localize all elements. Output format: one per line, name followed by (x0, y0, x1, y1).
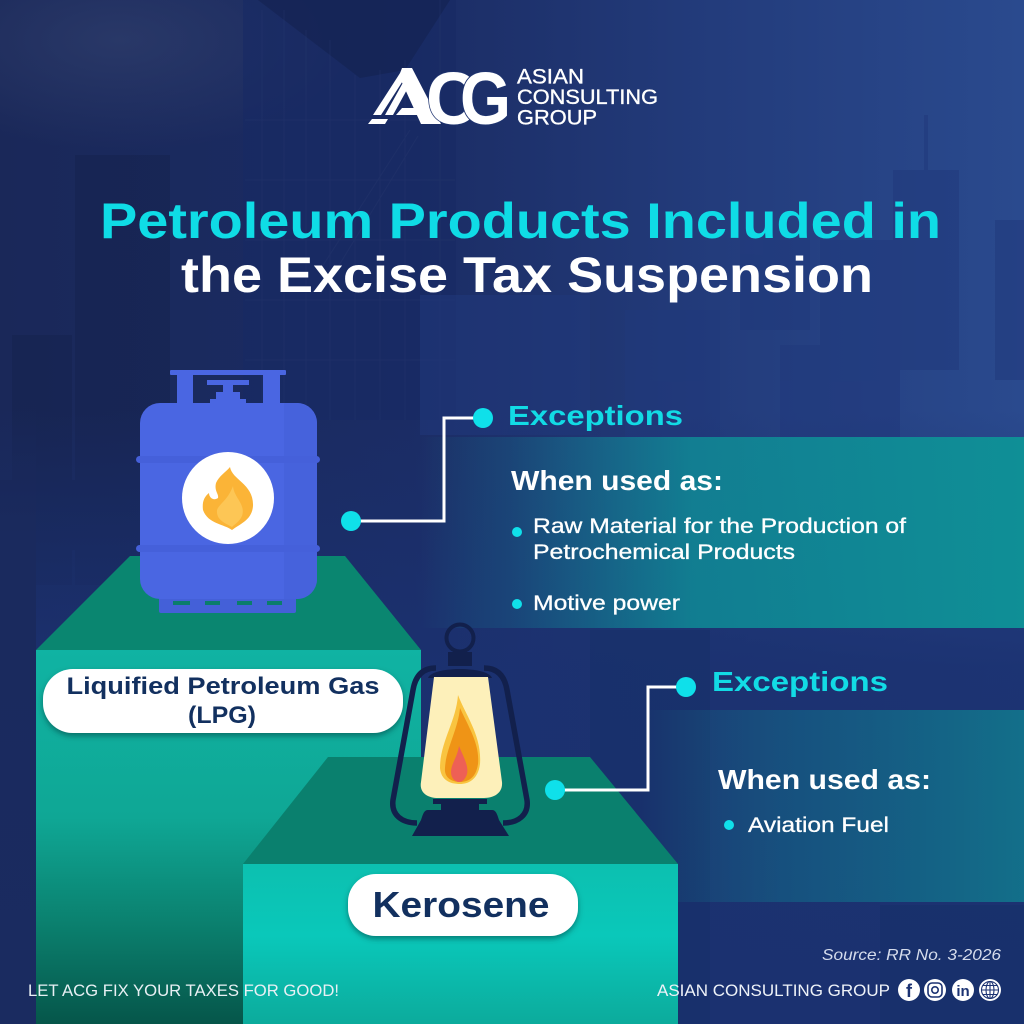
icon: linkedin: in (956, 983, 970, 1000)
logo wordmark: CONSULTING (517, 86, 658, 109)
logo: Asian Consulting Group (368, 57, 658, 140)
social icons (898, 979, 1001, 1001)
text block: LPG exceptions (508, 400, 906, 615)
text block: LPG exceptions: Motive power (533, 592, 680, 615)
title: Petroleum Products Included in (100, 193, 941, 249)
title (100, 193, 941, 303)
pedestal: LPG (36, 556, 421, 1024)
icon: LPG cylinder (136, 370, 320, 613)
label: kerosene pill (348, 874, 578, 936)
logo wordmark (517, 66, 658, 130)
panel: LPG exceptions band (420, 437, 1024, 628)
icon: facebook: f (906, 981, 913, 1001)
icon: website globe (979, 979, 1001, 1001)
footer tagline: LET ACG FIX YOUR TAXES FOR GOOD! (28, 982, 339, 1000)
logo wordmark: ASIAN (517, 66, 584, 88)
label: LPG pill: Liquified Petroleum Gas (66, 673, 380, 700)
footer brand name: ASIAN CONSULTING GROUP (657, 982, 890, 1000)
title: the Excise Tax Suspension (181, 247, 873, 303)
icon: instagram (924, 979, 946, 1001)
label: LPG pill: (LPG) (188, 702, 256, 729)
icon: kerosene lantern (393, 624, 527, 836)
logo mark: C (426, 57, 478, 140)
source note: Source: RR No. 3-2026 (822, 947, 1001, 964)
pedestal: kerosene (243, 757, 678, 1024)
text block: LPG exceptions: Exceptions (508, 400, 683, 431)
text block: LPG exceptions: When used as: (511, 465, 723, 496)
text block: kerosene exceptions: Aviation Fuel (748, 814, 889, 837)
logo mark: G (460, 57, 511, 140)
connector: LPG to exceptions (341, 408, 493, 531)
text block: LPG exceptions: Petrochemical Products (533, 541, 795, 564)
logo wordmark: GROUP (517, 106, 597, 130)
label: kerosene pill: Kerosene (372, 884, 550, 925)
text block: kerosene exceptions (712, 666, 931, 837)
label: LPG pill (43, 669, 403, 733)
text block: kerosene exceptions: When used as: (718, 764, 931, 795)
logo mark (368, 57, 511, 140)
text block: kerosene exceptions: Exceptions (712, 666, 888, 697)
text block: LPG exceptions: Raw Material for the Production of (533, 515, 906, 538)
connector: kerosene to exceptions (545, 677, 696, 800)
panel: kerosene exceptions band (640, 710, 1024, 902)
